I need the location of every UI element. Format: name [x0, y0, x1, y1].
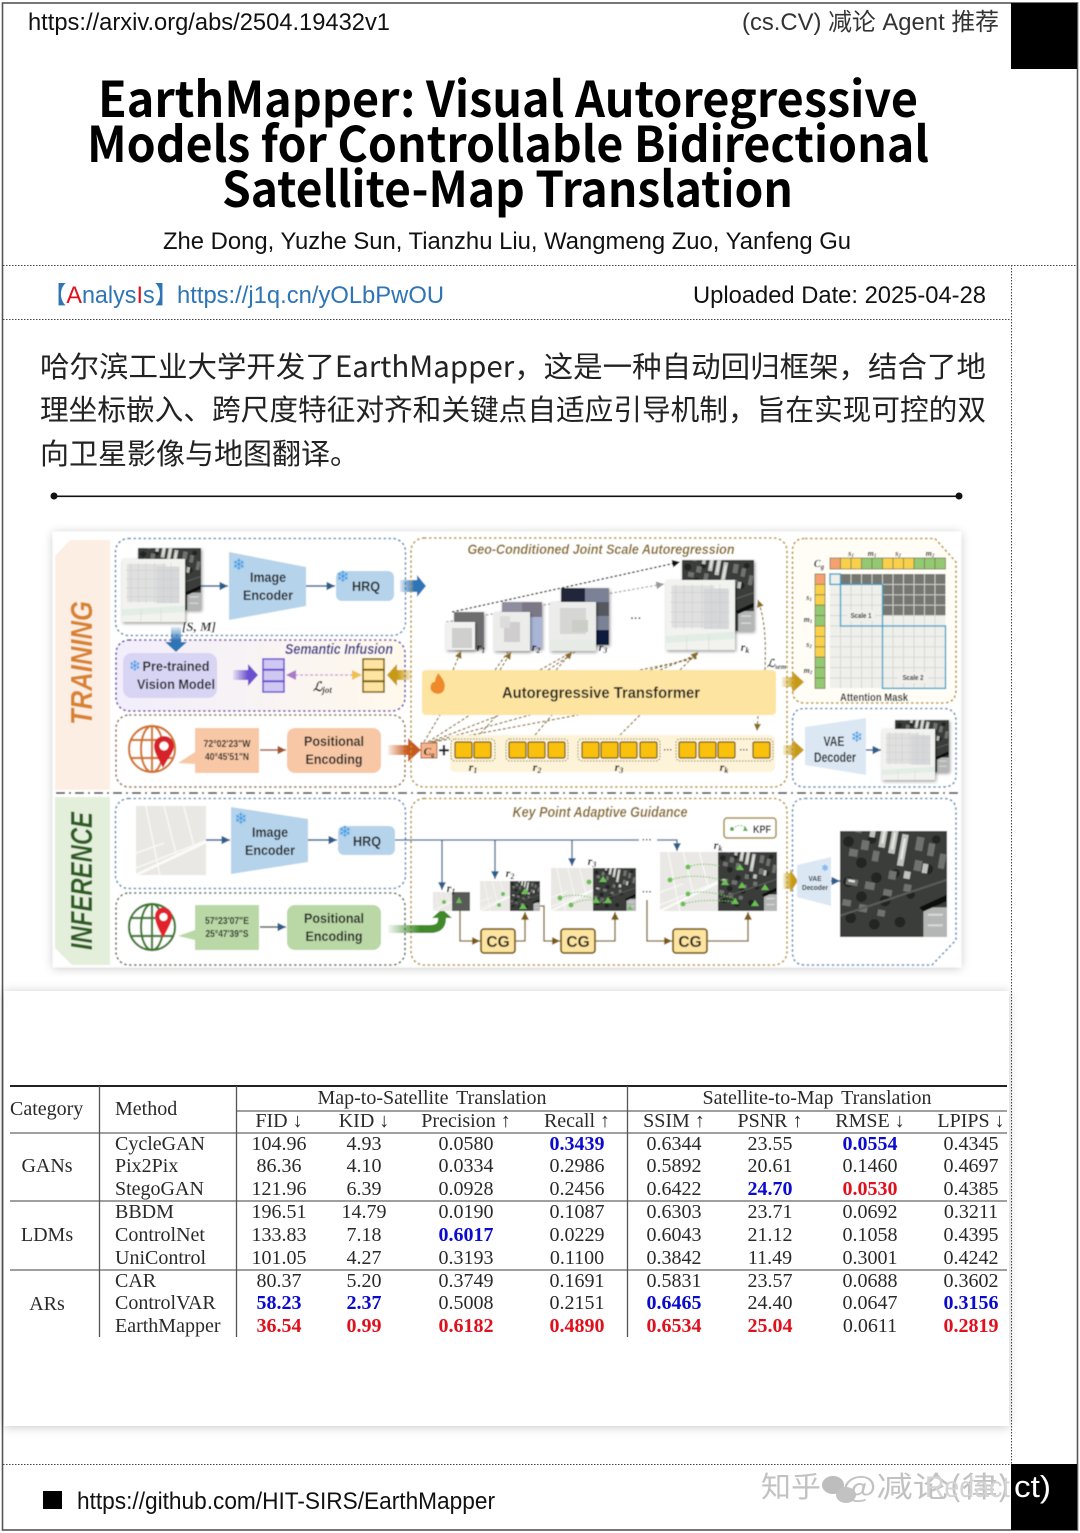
row: EarthMapper: 0.6182 — [438, 1315, 494, 1337]
row: ControlNet: ControlNet — [115, 1224, 205, 1246]
watermark end on black block: ct) — [1014, 1469, 1051, 1504]
row: UniControl: 0.3001 — [842, 1247, 898, 1269]
row: StegoGAN: 0.6422 — [646, 1178, 702, 1200]
row: UniControl: 0.3193 — [438, 1247, 494, 1269]
row: UniControl: 4.27 — [346, 1247, 382, 1269]
panel: inference image encoder: HRQ — [353, 833, 381, 849]
panel: inference positional encoding — [116, 893, 405, 965]
token sequence: r — [469, 760, 473, 774]
panel: attention mask: 2 — [808, 645, 812, 650]
panel: attention mask: 2 — [809, 671, 813, 676]
row: StegoGAN: 0.0928 — [438, 1178, 494, 1200]
row: StegoGAN: 0.2456 — [550, 1178, 604, 1200]
row: StegoGAN: 6.39 — [346, 1178, 382, 1200]
row: CycleGAN: 0.4345 — [944, 1133, 998, 1155]
panel: attention mask: s — [806, 593, 809, 602]
row: ControlVAR: 2.37 — [346, 1292, 382, 1314]
analysis link — [43, 282, 444, 309]
table rules — [10, 1086, 1007, 1337]
green guidance arrow — [388, 909, 452, 929]
row: BBDM: 0.1087 — [550, 1201, 604, 1223]
category labels: GANs — [21, 1155, 73, 1177]
panel: key point adaptive guidance: r — [588, 854, 592, 868]
row: CAR: CAR — [115, 1270, 157, 1292]
inference stripe: INFERENCE — [64, 811, 99, 950]
panel: key point adaptive guidance: ··· — [642, 835, 652, 846]
token sequence: C — [424, 746, 431, 758]
panel: training image encoder: HRQ — [352, 578, 380, 594]
row: CycleGAN: 0.0554 — [842, 1133, 898, 1155]
panel: inference positional encoding: Positional — [304, 910, 364, 926]
panel: key point adaptive guidance: k — [718, 844, 722, 853]
token sequence: k — [724, 766, 728, 775]
row: StegoGAN: 0.0530 — [842, 1178, 898, 1200]
title: Satellite-Map Translation — [222, 151, 793, 222]
panel: inference VAE decoder: ❄ — [821, 864, 829, 874]
row: Pix2Pix: 0.0334 — [438, 1155, 494, 1177]
table header: Recall ↑ — [544, 1110, 610, 1132]
token sequence: 3 — [618, 766, 623, 775]
panel: attention mask: 1 — [810, 620, 812, 625]
panel: attention mask — [782, 538, 956, 704]
panel: attention mask: 2 — [931, 554, 935, 559]
scale image pyramid: r — [532, 640, 536, 654]
arXiv link: https://arxiv.org/abs/2504.19432v1 — [28, 9, 390, 36]
architecture diagram — [53, 532, 961, 967]
row: Pix2Pix: 20.61 — [748, 1155, 792, 1177]
row: UniControl — [115, 1247, 998, 1269]
row: BBDM: 0.6303 — [646, 1201, 702, 1223]
token sequence: + — [438, 740, 450, 762]
table header: Category — [10, 1098, 83, 1120]
token sequence: r — [720, 760, 724, 774]
CG blocks: CG — [486, 934, 510, 951]
row: ControlVAR: 0.3156 — [944, 1292, 998, 1314]
panel: geo-conditioned joint scale autoregression: ℒ — [767, 658, 775, 670]
panel: training positional encoding: 72°02'23"W — [204, 739, 251, 750]
panel: semantic infusion: Vision Model — [137, 676, 215, 692]
row: Pix2Pix — [115, 1155, 998, 1177]
token sequence: ··· — [664, 745, 672, 755]
row: StegoGAN: 0.4385 — [944, 1178, 998, 1200]
row: BBDM: 0.3211 — [944, 1201, 998, 1223]
panel: semantic infusion: ℒ — [313, 679, 322, 694]
row: Pix2Pix: 0.5892 — [646, 1155, 702, 1177]
watermark — [761, 1464, 1011, 1506]
row: CAR: 5.20 — [346, 1270, 382, 1292]
panel: training VAE decoder: VAE — [824, 734, 844, 749]
row: Pix2Pix: Pix2Pix — [115, 1155, 178, 1177]
panel: inference image encoder — [116, 798, 406, 888]
CG blocks: CG — [678, 934, 702, 951]
panel: inference positional encoding: Encoding — [306, 928, 362, 944]
token sequence: r — [615, 760, 619, 774]
row: BBDM: 0.0190 — [438, 1201, 494, 1223]
table header: Precision ↑ — [421, 1110, 511, 1132]
row: StegoGAN: 24.70 — [748, 1178, 792, 1200]
panel: training image encoder: Encoder — [243, 587, 293, 603]
row: EarthMapper: 36.54 — [256, 1315, 302, 1337]
row: CycleGAN — [115, 1133, 998, 1155]
scale image pyramid: r — [741, 640, 745, 654]
panel: training VAE decoder: ❄ — [851, 728, 863, 746]
panel: training VAE decoder: Decoder — [814, 750, 857, 765]
panel: semantic infusion — [116, 627, 412, 711]
panel: attention mask: C — [814, 559, 821, 570]
panel: training positional encoding: Encoding — [306, 751, 362, 767]
row: ControlVAR: 0.2151 — [550, 1292, 604, 1314]
row: ControlNet — [115, 1224, 998, 1246]
row: ControlVAR: 58.23 — [256, 1292, 302, 1314]
watermark: Redact — [925, 1471, 1011, 1504]
token sequence — [421, 735, 775, 775]
scale image pyramid: ··· — [630, 613, 642, 625]
row: CycleGAN: 104.96 — [252, 1133, 306, 1155]
CG blocks: CG — [566, 934, 590, 951]
row: Pix2Pix: 4.10 — [346, 1155, 382, 1177]
row: StegoGAN: StegoGAN — [115, 1178, 204, 1200]
table header: FID ↓ — [255, 1110, 303, 1132]
table header: KID ↓ — [339, 1110, 389, 1132]
row: ControlVAR: ControlVAR — [115, 1292, 216, 1314]
row: BBDM: 14.79 — [342, 1201, 386, 1223]
row: CAR: 80.37 — [256, 1270, 302, 1292]
panel: semantic infusion: Pre-trained — [142, 658, 210, 674]
stage separator — [56, 792, 958, 794]
panel: semantic infusion: jot — [320, 685, 332, 695]
inference stripe — [55, 797, 110, 965]
watermark: 知乎 — [761, 1464, 821, 1506]
row: CAR: 0.5831 — [646, 1270, 702, 1292]
row: CycleGAN: 23.55 — [748, 1133, 792, 1155]
panel: training image encoder — [116, 538, 426, 636]
table header — [10, 1087, 1005, 1132]
row: UniControl: 0.1100 — [550, 1247, 604, 1269]
KPF legend — [724, 818, 776, 838]
category labels: ARs — [29, 1293, 65, 1315]
panel: training positional encoding: 40°45'51"N — [205, 752, 249, 763]
panel: inference VAE decoder: VAE — [808, 874, 822, 883]
autoregressive transformer: Autoregressive Transformer — [502, 685, 700, 702]
row: BBDM — [115, 1201, 998, 1223]
scale image pyramid: k — [745, 646, 749, 655]
row: CAR — [115, 1270, 998, 1292]
scale image pyramid: r — [599, 640, 603, 654]
KPF legend: KPF — [753, 824, 771, 836]
table header: Map-to-Satellite Translation — [317, 1087, 547, 1109]
panel: key point adaptive guidance: 3 — [591, 860, 596, 869]
table header: RMSE ↓ — [835, 1110, 905, 1132]
panel: attention mask: s — [848, 549, 851, 558]
progressive key point pairs — [432, 847, 778, 911]
panel: inference VAE decoder: Decoder — [802, 883, 828, 892]
scale image pyramid — [446, 553, 756, 655]
row: CAR: 0.1691 — [550, 1270, 604, 1292]
table header: PSNR ↑ — [737, 1110, 803, 1132]
row: UniControl: 0.4242 — [944, 1247, 998, 1269]
category labels: LDMs — [21, 1224, 73, 1246]
row: Pix2Pix: 0.2986 — [550, 1155, 604, 1177]
HRQ feed lines — [395, 840, 677, 890]
GitHub link: https://github.com/HIT-SIRS/EarthMapper — [77, 1488, 495, 1515]
panel: key point adaptive guidance: r — [714, 838, 718, 852]
panel: semantic infusion: ❄ — [129, 657, 141, 675]
panel: attention mask: Scale 1 — [850, 611, 872, 620]
panel: semantic infusion: Semantic Infusion — [285, 642, 393, 658]
summary paragraph: 向卫星影像与地图翻译。 — [40, 431, 359, 473]
summary paragraph: 理坐标嵌入、跨尺度特征对齐和关键点自适应引导机制，旨在实现可控的双 — [40, 387, 986, 429]
comparison table panel — [4, 991, 1009, 1426]
row: ControlNet: 0.1058 — [842, 1224, 898, 1246]
row: BBDM: 23.71 — [748, 1201, 792, 1223]
panel: attention mask: Attention Mask — [840, 692, 909, 704]
panel: key point adaptive guidance: r — [447, 881, 451, 895]
summary paragraph — [40, 344, 986, 473]
row: CAR: 0.3602 — [944, 1270, 998, 1292]
panel: training VAE decoder — [783, 708, 956, 787]
token sequence: r — [533, 760, 537, 774]
panel: attention mask: m — [926, 549, 932, 558]
training stripe: TRAINING — [64, 601, 99, 725]
upload date: Uploaded Date: 2025-04-28 — [693, 282, 986, 309]
row: ControlNet: 7.18 — [346, 1224, 382, 1246]
panel: key point adaptive guidance: 2 — [509, 872, 514, 881]
panel: attention mask: 1 — [809, 598, 812, 603]
row: CycleGAN: CycleGAN — [115, 1133, 205, 1155]
panel: attention mask: m — [804, 666, 810, 675]
category and tag: (cs.CV) 减论 Agent 推荐 — [742, 9, 999, 36]
panel: training positional encoding: Positional — [304, 733, 364, 749]
row: ControlVAR: 0.5008 — [438, 1292, 494, 1314]
row: EarthMapper: 0.6534 — [646, 1315, 702, 1337]
row: CAR: 0.3749 — [438, 1270, 494, 1292]
panel: attention mask: g — [820, 563, 825, 571]
panel: inference image encoder: ❄ — [338, 822, 352, 841]
row: UniControl: UniControl — [115, 1247, 207, 1269]
panel: geo-conditioned joint scale autoregression — [411, 538, 787, 787]
row: ControlVAR: 0.6465 — [646, 1292, 702, 1314]
panel: training image encoder: [S, M] — [182, 619, 216, 634]
watermark: @减论(律) — [842, 1464, 1010, 1506]
row: CAR: 23.57 — [748, 1270, 792, 1292]
row: EarthMapper: 0.2819 — [944, 1315, 998, 1337]
autoregressive transformer — [422, 670, 776, 715]
row: ControlVAR — [115, 1292, 998, 1314]
dashed token connections — [424, 600, 765, 742]
panel: key point adaptive guidance: ··· — [642, 887, 652, 898]
row: BBDM: 0.0692 — [842, 1201, 898, 1223]
training stripe — [55, 540, 110, 790]
CG blocks — [481, 929, 707, 953]
token sequence: ··· — [740, 745, 748, 755]
divider with end dots — [50, 492, 962, 500]
panel: training positional encoding — [116, 715, 421, 787]
row: ControlNet: 0.4395 — [944, 1224, 998, 1246]
panel: inference positional encoding: 57°23'07"E — [205, 916, 249, 927]
summary paragraph: 哈尔滨工业大学开发了EarthMapper，这是一种自动回归框架，结合了地 — [40, 344, 986, 386]
row: UniControl: 0.3842 — [646, 1247, 702, 1269]
panel: attention mask: m — [804, 615, 810, 624]
analysis link: 【AnalysIs】 — [43, 282, 178, 309]
row: UniControl: 11.49 — [748, 1247, 792, 1269]
row: Pix2Pix: 0.4697 — [944, 1155, 998, 1177]
row: ControlVAR: 24.40 — [748, 1292, 792, 1314]
token sequence: g — [430, 751, 435, 759]
row: ControlNet: 0.6017 — [438, 1224, 494, 1246]
row: CycleGAN: 0.6344 — [646, 1133, 702, 1155]
panel: inference image encoder: ❄ — [234, 809, 248, 828]
row: ControlNet: 21.12 — [748, 1224, 792, 1246]
row: Pix2Pix: 86.36 — [256, 1155, 302, 1177]
table header: SSIM ↑ — [643, 1110, 705, 1132]
diagram card — [53, 532, 961, 967]
row: CAR: 0.0688 — [842, 1270, 898, 1292]
CG connectors — [460, 900, 748, 941]
row: ControlNet: 0.0229 — [550, 1224, 604, 1246]
panel: key point adaptive guidance: r — [506, 866, 510, 880]
table header: Method — [115, 1098, 177, 1120]
title — [87, 61, 929, 222]
authors: Zhe Dong, Yuzhe Sun, Tianzhu Liu, Wangmeng Zuo, Yanfeng Gu — [163, 228, 851, 255]
row: UniControl: 101.05 — [252, 1247, 306, 1269]
panel: geo-conditioned joint scale autoregression: Geo-Conditioned Joint Scale Autoregression — [468, 541, 734, 557]
panel: training image encoder: ❄ — [336, 567, 350, 586]
panel: attention mask: 2 — [897, 554, 901, 559]
panel: inference image encoder: Encoder — [245, 842, 295, 858]
panel: key point adaptive guidance: Key Point Adaptive Guidance — [512, 805, 688, 821]
panel: training image encoder: Image — [250, 569, 286, 585]
bottom-right black block — [1011, 1464, 1077, 1530]
scale image pyramid: 2 — [535, 646, 540, 655]
panel: training image encoder: ❄ — [232, 555, 246, 574]
panel: inference positional encoding: 25°47'39"S — [206, 929, 249, 940]
scale image pyramid: 3 — [602, 646, 607, 655]
panel: attention mask: m — [868, 549, 874, 558]
row: EarthMapper — [115, 1315, 998, 1337]
table header: Satellite-to-Map Translation — [702, 1087, 932, 1109]
panel: key point adaptive guidance: 1 — [451, 887, 455, 896]
panel: attention mask: Scale 2 — [902, 673, 924, 682]
row: EarthMapper: 0.4890 — [550, 1315, 604, 1337]
row: StegoGAN — [115, 1178, 998, 1200]
top-right black block — [1011, 3, 1077, 69]
panel: attention mask: 1 — [851, 554, 854, 559]
row: CycleGAN: 4.93 — [346, 1133, 382, 1155]
table header: LPIPS ↓ — [937, 1110, 1005, 1132]
row: EarthMapper: 0.99 — [346, 1315, 382, 1337]
panel: attention mask: 1 — [874, 554, 876, 559]
row: StegoGAN: 121.96 — [252, 1178, 306, 1200]
row: EarthMapper: EarthMapper — [115, 1315, 221, 1337]
row: CycleGAN: 0.0580 — [438, 1133, 494, 1155]
row: ControlNet: 133.83 — [252, 1224, 306, 1246]
title: EarthMapper: Visual Autoregressive — [98, 61, 918, 132]
category labels — [21, 1155, 73, 1315]
row: EarthMapper: 25.04 — [748, 1315, 792, 1337]
panel: key point adaptive guidance — [388, 798, 787, 965]
analysis link: https://j1q.cn/yOLbPwOU — [177, 282, 444, 309]
panel: inference image encoder: Image — [252, 824, 288, 840]
row: BBDM: 196.51 — [252, 1201, 306, 1223]
panel: geo-conditioned joint scale autoregression: sem — [774, 663, 787, 671]
row: ControlVAR: 0.0647 — [842, 1292, 898, 1314]
panel: attention mask: s — [895, 549, 898, 558]
footer bullet — [43, 1491, 62, 1509]
token sequence: 2 — [536, 766, 541, 775]
token sequence: 1 — [473, 766, 477, 775]
scale image pyramid: 1 — [481, 646, 485, 655]
scale image pyramid: r — [477, 640, 481, 654]
panel: attention mask: s — [806, 640, 809, 649]
row: ControlNet: 0.6043 — [646, 1224, 702, 1246]
row: EarthMapper: 0.0611 — [843, 1315, 897, 1337]
row: BBDM: BBDM — [115, 1201, 174, 1223]
title: Models for Controllable Bidirectional — [87, 106, 929, 177]
panel: inference VAE decoder — [783, 798, 956, 965]
row: CycleGAN: 0.3439 — [550, 1133, 604, 1155]
row: Pix2Pix: 0.1460 — [842, 1155, 898, 1177]
